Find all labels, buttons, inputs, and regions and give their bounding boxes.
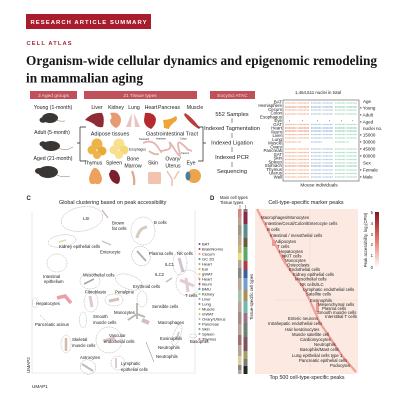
panel: C global clustering UMAP — [26, 196, 226, 389]
marker labels: Basophils/Mast cells — [300, 347, 339, 352]
marker labels — [261, 215, 357, 368]
panel D title: Cell-type-specific marker peaks — [268, 200, 344, 206]
cluster labels: Monocytes — [114, 310, 135, 315]
heatmap — [255, 209, 358, 374]
marker labels: Mesothelial cells — [295, 276, 327, 282]
organ labels: Lung — [128, 105, 140, 111]
marker labels: Lung epithelial cells type 1 — [292, 353, 343, 358]
marker labels: Hepatocytes — [279, 249, 303, 254]
row labels: Spleen — [268, 160, 283, 164]
marker labels: Kidney epithelial cells — [293, 272, 334, 277]
y axis label: Peak accessibility, log₂(CPM) — [363, 212, 368, 267]
row labels: Esophagus — [260, 114, 283, 120]
organ labels: Pancreas — [158, 105, 180, 111]
legend: tissues: Cecum — [202, 252, 215, 256]
marker labels: NK/T cells — [282, 254, 302, 258]
bracket: tissue group — [77, 127, 206, 161]
heading: 3 aged groups: 3 Aged groups — [38, 93, 70, 99]
workflow steps: Sequencing — [217, 169, 247, 175]
legend: tissues: Liver — [202, 296, 211, 302]
icon: kidney — [110, 113, 121, 128]
lower organ labels — [84, 156, 196, 170]
legend: age, sex: • Female — [360, 168, 378, 172]
row labels: Hemisphere — [258, 103, 283, 108]
cluster labels: Fibroblasts — [85, 290, 106, 294]
cluster labels: Smooth — [93, 314, 108, 319]
marker labels: Mesenchymal cells — [318, 302, 354, 307]
lower organ labels: Uterus — [165, 164, 181, 170]
row labels: Thymus — [266, 167, 283, 172]
cluster labels: Erythroid cells — [133, 284, 160, 289]
arrows — [231, 118, 233, 167]
icon: ovary and uterus — [167, 171, 179, 186]
title: Organism-wide cellular dynamics and epigenomic remodeling — [26, 54, 377, 69]
icon: heart — [144, 113, 156, 129]
axis labels: UMAP2 — [26, 357, 31, 373]
icon: pancreas — [163, 116, 177, 129]
organ labels: Muscle — [187, 105, 203, 111]
row labels: Liver — [272, 133, 283, 138]
legend: tissues: Thymus — [202, 336, 216, 342]
GI labels — [129, 136, 189, 155]
row labels: Wall — [274, 174, 282, 180]
labels: adipose and gastrointestinal: Adipose tissues — [91, 132, 130, 138]
legend: tissues: BMU — [202, 286, 211, 292]
workflow steps: 552 Samples — [215, 112, 249, 118]
cluster labels: Vascular — [109, 333, 126, 338]
colorbar: 0 — [371, 265, 374, 270]
cluster labels: Astrocytes — [80, 355, 100, 360]
marker labels: Pancreatic epithelial cells — [299, 358, 347, 363]
colorbar — [371, 210, 379, 270]
clusters — [32, 204, 200, 377]
cluster labels: Mesothelial cells — [83, 272, 115, 278]
banner: research article summary — [26, 14, 151, 29]
legend: age, sex: • Aged — [360, 120, 374, 124]
legend: tissues: Muscle — [202, 306, 215, 312]
cluster labels: Skeletal — [72, 337, 87, 342]
cluster labels: LSI — [83, 216, 89, 221]
cluster labels: NK cells — [177, 251, 193, 256]
marker labels: Plasma cells — [322, 306, 346, 311]
marker labels: Hair keratinocytes — [285, 327, 319, 332]
cluster labels: Neutrophils — [156, 354, 178, 359]
cluster labels: Kidney epithelial cells — [59, 244, 100, 249]
label: aged: Aged (21-month) — [34, 156, 73, 162]
annotation labels: Tissue types — [220, 200, 243, 205]
row labels: Heart — [271, 126, 283, 131]
panel: tissue types — [77, 91, 206, 186]
lower organ labels: Marrow — [124, 164, 142, 170]
label: adult: Adult (5-month) — [34, 130, 70, 136]
legend: age, sex: • Male — [360, 174, 373, 180]
marker labels: T cells — [277, 244, 289, 249]
icon: gastrointestinal tract — [143, 142, 192, 156]
panel C title: Global clustering based on peak accessibility — [59, 200, 167, 206]
cluster labels: Perialpine — [115, 290, 135, 294]
row labels: Ovary — [270, 144, 283, 150]
marker labels: B cells — [267, 227, 280, 232]
cluster labels: Enterocyte — [100, 250, 121, 254]
marker labels: Satellite cells — [306, 292, 331, 296]
cluster labels — [35, 216, 209, 372]
cluster labels: Brown — [112, 220, 125, 226]
marker labels: Interstitial T cells — [325, 314, 357, 319]
legend: age, sex: Sex — [363, 160, 372, 166]
lower organ labels: Skin — [148, 160, 158, 166]
panel letter C: C — [26, 196, 32, 202]
marker labels: Adipocytes — [275, 239, 296, 244]
UMAP axes — [32, 210, 195, 373]
legend: age, sex: • 45000 — [360, 146, 376, 152]
organ labels: Liver — [91, 105, 103, 111]
lower organ labels: Bone — [127, 156, 139, 162]
cluster labels: Macrophages — [158, 320, 184, 325]
organ labels: Heart — [145, 105, 158, 111]
marker labels: Podocytes — [330, 363, 350, 368]
banner: research article summary: RESEARCH ARTICLE SUMMARY — [30, 20, 147, 26]
icon: eye — [186, 169, 201, 183]
cluster labels: ILC1 — [165, 262, 175, 267]
icon: adipose tissues — [88, 138, 128, 159]
icon: lung — [126, 113, 140, 127]
legend: age, sex: Age — [363, 99, 372, 104]
heading: ExcySci ATAC: ExcySci ATAC — [217, 93, 248, 99]
panel: ExcySci ATAC workflow — [204, 91, 260, 175]
legend: tissues: BAT — [202, 242, 210, 246]
icon: liver — [85, 113, 104, 127]
panel: D cell-type-specific marker peaks — [210, 195, 379, 381]
heatmap title: 1,464,511 nuclei in total — [295, 90, 341, 95]
cluster labels: muscle cells — [93, 320, 116, 325]
icon: young mouse — [40, 113, 65, 123]
row labels: Cecum — [268, 107, 282, 112]
legend: tissues: gWAT — [202, 272, 213, 276]
lower organ labels: Spleen — [106, 160, 122, 166]
colorbar: 2 — [371, 242, 374, 247]
cluster labels: T cells — [185, 293, 197, 298]
cluster labels: muscle cells — [72, 343, 95, 348]
row labels — [258, 100, 283, 180]
icon: thymus — [89, 168, 102, 184]
annotation column: tissue types — [244, 209, 248, 374]
workflow steps: Indexed Tagmentation — [204, 126, 260, 132]
axis label: cell types: Tissue-specific cell types — [249, 274, 254, 320]
row labels: Skin — [273, 156, 283, 161]
lower organ labels: Ovary/ — [165, 156, 181, 162]
legend: tissues: Kidney — [202, 292, 214, 296]
title — [26, 54, 377, 86]
icon: bone marrow — [132, 171, 134, 185]
cluster labels: Basophils — [190, 339, 209, 344]
axis labels: UMAP1 — [32, 384, 48, 389]
row labels: Lung — [272, 137, 283, 142]
workflow steps: Indexed Ligation — [211, 140, 253, 146]
workflow steps: Indexed PCR — [215, 155, 249, 161]
marker labels: NK cells/ILC — [300, 282, 324, 287]
panel: aged groups — [30, 91, 77, 178]
legend: tissues: Heart — [202, 276, 213, 282]
cluster labels: endothelial cells — [104, 339, 135, 344]
row labels: Muscle — [268, 141, 283, 146]
labels: adipose and gastrointestinal — [91, 132, 198, 138]
row labels: Ileum — [271, 130, 282, 134]
icon: aged mouse — [35, 166, 70, 178]
marker labels: Muscle satellite cell — [292, 332, 329, 337]
axis labels — [26, 357, 48, 389]
cluster labels: Pancreatic acinus — [35, 322, 69, 327]
marker labels: Monocytes — [285, 258, 306, 263]
row labels: SAT — [274, 152, 282, 157]
label: young: Young (1-month) — [34, 105, 72, 111]
legend: tissues: BrainNorms — [202, 246, 223, 252]
cluster labels: Plasma cells — [149, 251, 173, 256]
GI labels: Stomach — [139, 137, 150, 141]
lower organ labels: Eye — [187, 160, 196, 166]
heatmap frame and cells — [283, 100, 359, 181]
marker labels: Intestine/Cecal/Colon/Enterocyte cells — [265, 221, 337, 226]
legend: age, sex: nuclei no. — [363, 126, 382, 131]
cluster labels: Lymphatic — [121, 361, 141, 366]
workflow steps — [204, 112, 260, 175]
marker labels: Smooth muscle cells — [317, 310, 356, 315]
GI labels: Cecum — [181, 151, 189, 155]
legend: age, sex: • 30000 — [360, 140, 376, 144]
marker labels: Eosinophils — [310, 298, 332, 303]
legend: age, sex: • Adult — [360, 112, 374, 118]
icon: skin — [148, 172, 161, 184]
marker labels: Neutrophils — [314, 342, 336, 347]
colorbar: 3 — [371, 232, 374, 237]
cluster labels: Neutrophils — [158, 345, 180, 350]
legend: tissues: Pancreas — [202, 322, 219, 326]
icon: adult mouse — [40, 141, 73, 151]
marker labels: Macrophages/Monocytes — [261, 215, 309, 220]
legend: tissues: mWAT — [202, 312, 214, 316]
marker labels: Endothelial cells — [289, 267, 320, 272]
cluster labels: epithelium — [44, 279, 64, 284]
legend: tissues: Heart — [202, 262, 213, 266]
GI labels: Colon — [180, 136, 187, 140]
legend: tissues: Skin — [202, 326, 210, 332]
panel: B heatmap of nuclei per tissue — [258, 90, 382, 188]
annotation labels: Main cell types — [220, 195, 248, 200]
legend: tissues: Lung — [202, 302, 211, 306]
x axis label: Top 500 cell-type-specific peaks — [269, 375, 345, 381]
row labels: BAT — [274, 100, 282, 104]
panel letter D: D — [210, 196, 215, 202]
icon: spleen — [109, 170, 120, 184]
colorbar: 4 — [371, 221, 374, 226]
marker labels: Enteric neurons — [288, 316, 318, 321]
row labels: Pancreas — [263, 148, 283, 153]
organ labels — [91, 105, 203, 111]
marker labels: Lymphatic endothelial cells — [303, 287, 354, 292]
row labels: Stomach — [265, 163, 283, 168]
legend: tissues: Ear — [202, 266, 209, 272]
marker labels: Intestinal / mesothelial cells — [270, 233, 322, 238]
cluster labels: epithelial cells — [121, 367, 148, 372]
cluster labels: Intestinal — [43, 274, 60, 279]
row labels: Uterus — [269, 171, 283, 176]
colorbar: 1 — [371, 253, 374, 258]
GI labels: Esophagus — [129, 148, 146, 152]
legend: age, sex — [360, 99, 382, 180]
marker labels: Osteoclasts — [287, 262, 309, 268]
heading: 21 tissue types: 21 Tissue types — [123, 93, 157, 99]
legend: tissues: Ileum — [202, 282, 212, 286]
legend: age, sex: • 60000 — [360, 154, 376, 158]
organ labels: Kidney — [108, 105, 124, 111]
colorbar: 5 — [371, 210, 374, 215]
cluster labels: B cells — [154, 220, 167, 225]
icon: muscle — [184, 113, 200, 129]
legend: age, sex: • Young — [360, 106, 376, 110]
legend: tissues: Spleen — [202, 332, 214, 336]
legend: age, sex: • 15000 — [360, 132, 376, 138]
cluster labels: ILC2 — [155, 272, 165, 277]
cluster labels: fat cells — [112, 226, 127, 231]
cluster labels: Sensible cells — [152, 304, 178, 309]
marker labels: Cardiomyocytes — [300, 337, 331, 342]
legend: tissues: GC 2D — [202, 256, 214, 262]
title: in mammalian aging — [26, 72, 143, 86]
annotation labels — [220, 195, 248, 209]
marker labels: Intrahepatic endothelial cells — [268, 321, 322, 326]
legend: tissues — [198, 242, 226, 342]
cluster labels: Eosinophils — [160, 336, 182, 341]
row labels: Eye — [274, 118, 283, 123]
cluster labels: Hepatocytes — [36, 301, 60, 306]
labels: adipose and gastrointestinal: Gastrointestinal Tract — [146, 132, 198, 138]
legend: tissues: Ovary/Uterus — [202, 316, 226, 322]
GI labels: Intestine — [156, 136, 166, 140]
lower organ labels: Thymus — [84, 160, 103, 166]
row labels: GAT — [273, 122, 282, 127]
section label: cell atlas: CELL ATLAS — [26, 41, 72, 47]
annotation column: main cell types — [238, 209, 242, 374]
row labels: Colon — [271, 111, 283, 116]
x axis label: Mouse individuals — [300, 182, 338, 188]
